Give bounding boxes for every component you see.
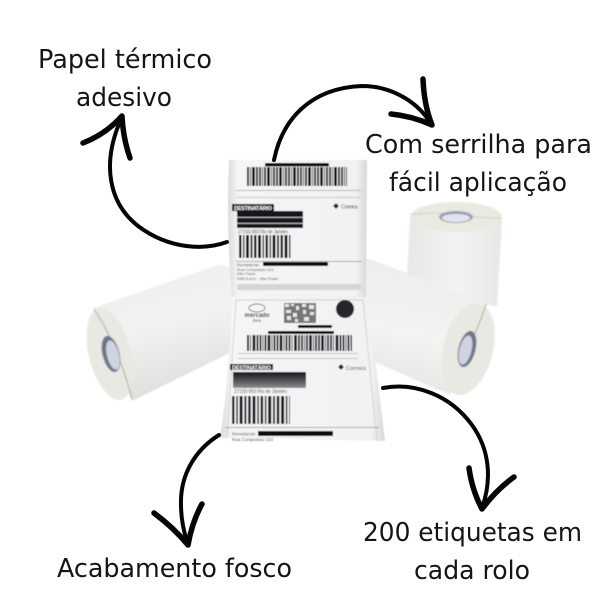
lower barcode xyxy=(232,396,290,424)
heading: Papel térmico adesivo: Papel térmico xyxy=(38,45,212,75)
dot xyxy=(336,300,354,318)
roll: lying at left xyxy=(78,265,236,405)
top barcode xyxy=(247,325,352,343)
postal code: 27193-993 Rio de Janeiro xyxy=(234,389,287,395)
logo: mercado livre: mercado xyxy=(244,313,270,319)
tag: DESTINATÁRIO: DESTINATÁRIO xyxy=(232,364,272,372)
redacted address xyxy=(233,372,306,388)
arrow: to Com serrilha para xyxy=(274,79,432,160)
sender block: 05815-610 - São Paulo xyxy=(237,276,279,281)
heading: Com serrilha para fácil aplicação: Com serrilha para xyxy=(365,130,592,160)
sender block: São Paulo xyxy=(237,271,256,276)
roll: upright at back right xyxy=(407,202,502,306)
logo: mercado livre xyxy=(244,304,270,323)
roll: lying at right front xyxy=(360,258,504,401)
logo: mercado livre: livre xyxy=(253,318,262,323)
logo: Correios: Correios xyxy=(341,204,358,210)
shipping label: upper xyxy=(228,160,367,298)
heading: 200 etiquetas em cada rolo: cada rolo xyxy=(414,556,530,586)
heading: Papel térmico adesivo xyxy=(38,45,212,113)
lower barcode xyxy=(239,235,291,258)
postal code: 27193-993 Rio de Janeiro xyxy=(238,230,288,236)
shipping label: lower xyxy=(220,297,385,442)
sender block: Rua Comprasso 310 xyxy=(232,437,274,442)
top barcode xyxy=(247,163,347,176)
heading: Com serrilha para fácil aplicação: fácil aplicação xyxy=(389,168,567,198)
logo: Correios: Correios xyxy=(346,366,366,372)
QR codes xyxy=(284,303,316,323)
redacted address xyxy=(237,211,303,228)
heading: 200 etiquetas em cada rolo xyxy=(363,518,582,586)
sender block: Remetente xyxy=(232,432,256,438)
heading: 200 etiquetas em cada rolo: 200 etiquetas em xyxy=(363,518,582,548)
arrow: to 200 etiquetas em cada rolo xyxy=(383,387,514,509)
heading: Com serrilha para fácil aplicação xyxy=(365,130,592,198)
heading: Acabamento fosco: Acabamento fosco xyxy=(57,554,292,584)
tag: DESTINATÁRIO: DESTINATÁRIO xyxy=(234,205,273,212)
sender block: Rua Comprasso 310 xyxy=(237,267,274,272)
arrow: to Acabamento fosco xyxy=(154,435,219,545)
sender block xyxy=(232,431,333,442)
sender block: Remetente xyxy=(237,262,260,268)
logo: Correios xyxy=(338,364,366,372)
arrow: to Papel térmico adesivo xyxy=(83,116,227,247)
sender block xyxy=(237,262,328,281)
heading: Papel térmico adesivo: adesivo xyxy=(76,83,172,113)
